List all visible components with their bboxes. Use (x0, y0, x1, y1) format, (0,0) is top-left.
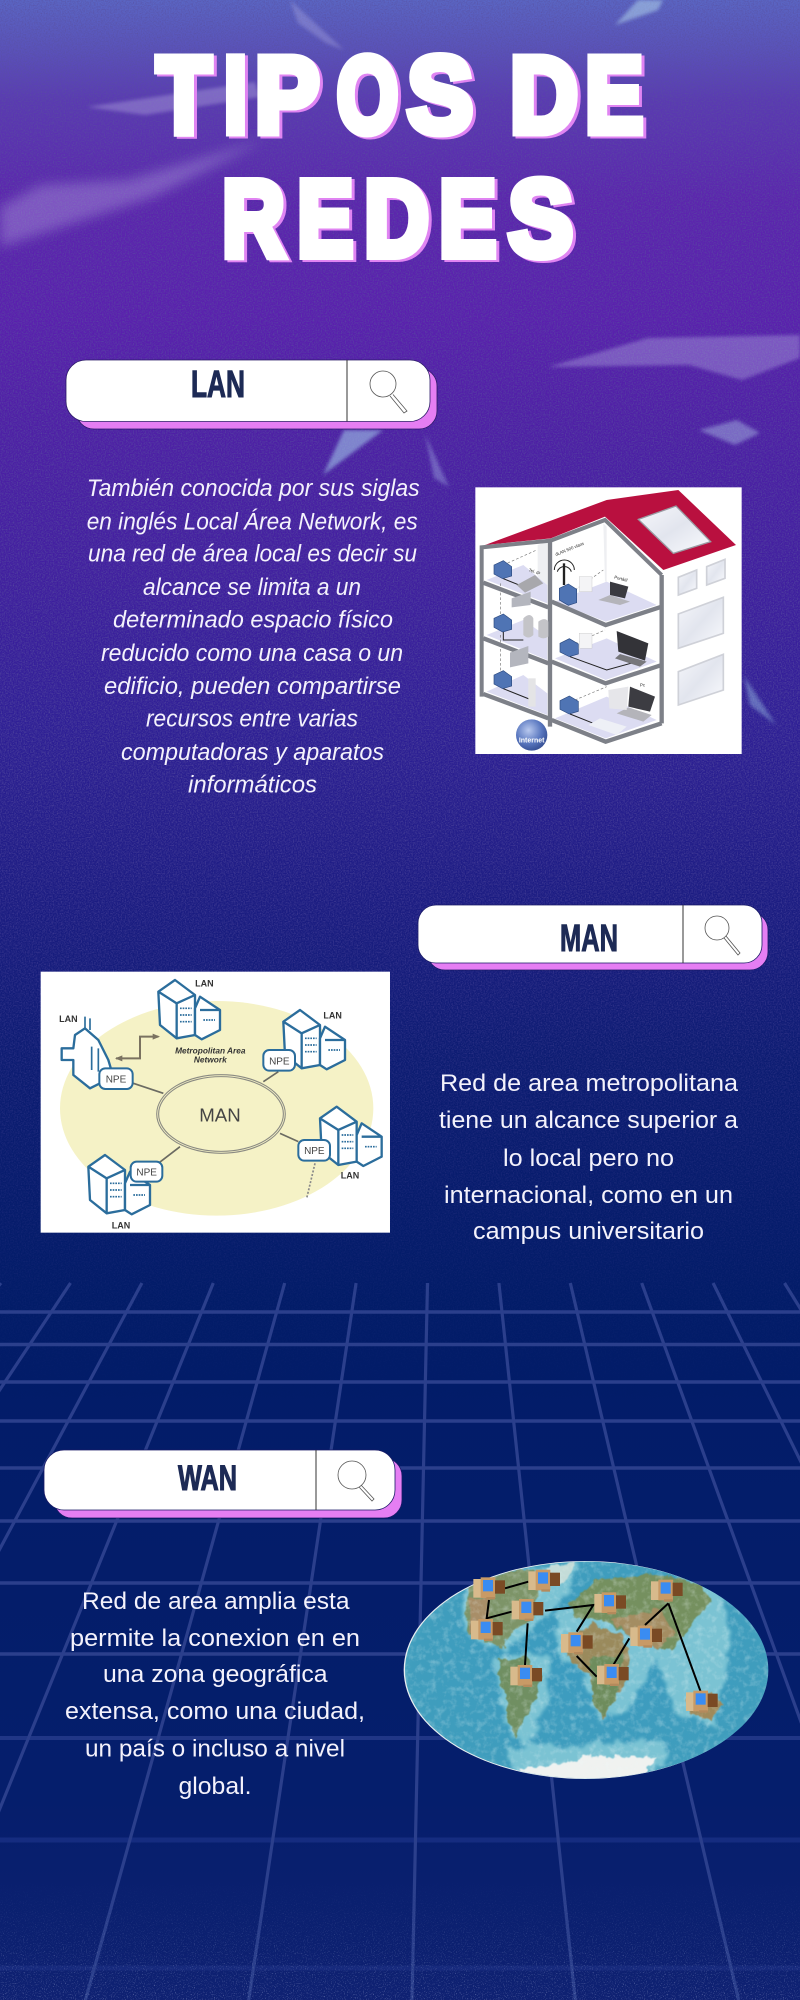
text block: LAN description (87, 475, 420, 799)
search bar: LAN: LAN (191, 364, 245, 406)
text block: WAN description (65, 1588, 365, 1800)
perspective grid (0, 1283, 800, 2000)
image: world map WAN diagram (403, 1560, 770, 1782)
text block: MAN description: tiene un alcance superior a (439, 1107, 738, 1134)
bottom sparkle texture (0, 1893, 800, 2000)
text block: LAN description: determinado espacio físico (113, 607, 393, 634)
image: MAN network diagram: Metropolitan Area (175, 1046, 246, 1056)
title: I (224, 36, 247, 156)
text block: WAN description: extensa, como una ciudad, (65, 1698, 365, 1725)
text block: LAN description: una red de área local es decir su (88, 541, 417, 568)
title: T (157, 34, 211, 155)
title: D (510, 36, 578, 156)
title: S (407, 35, 473, 155)
icon: magnifying glass (370, 371, 407, 413)
text block: LAN description: en inglés Local Área Network, es (87, 508, 418, 535)
title: E (297, 159, 353, 279)
title: S (508, 157, 573, 279)
image: MAN network diagram (41, 972, 390, 1233)
image: MAN network diagram: LAN (195, 979, 214, 989)
text block: WAN description: permite la conexion en en (70, 1625, 360, 1652)
text block: WAN description: global. (178, 1773, 252, 1800)
image: MAN network diagram: LAN (59, 1014, 78, 1024)
title: D (364, 157, 429, 278)
image: MAN network diagram: NPE (304, 1146, 325, 1157)
image: house LAN diagram: Pc (640, 683, 646, 688)
image: house LAN diagram: Internet (519, 738, 545, 745)
image: MAN network diagram: NPE (136, 1168, 157, 1179)
text block: WAN description: un país o incluso a nivel (85, 1736, 345, 1762)
search bar: WAN (44, 1450, 402, 1518)
text block: LAN description: recursos entre varias (146, 706, 358, 733)
text block: MAN description: campus universitario (473, 1218, 704, 1245)
text block: MAN description (439, 1070, 738, 1245)
search bar: MAN: MAN (560, 918, 618, 960)
image: MAN network diagram: LAN (341, 1170, 359, 1180)
image: MAN network diagram: NPE (106, 1075, 127, 1086)
text block: WAN description: una zona geográfica (103, 1661, 328, 1688)
text block: WAN description: Red de area amplia esta (82, 1588, 350, 1615)
image: house LAN diagram: dLAN 500 vlans (555, 541, 585, 557)
grain texture (0, 0, 800, 1400)
title: E (585, 34, 643, 155)
text block: LAN description: informáticos (188, 772, 317, 799)
image: house LAN diagram (475, 487, 742, 754)
search bar: WAN: WAN (178, 1459, 237, 1498)
image: house LAN diagram: Portátil (614, 574, 628, 583)
text block: LAN description: reducido como una casa o un (101, 640, 403, 667)
image: MAN network diagram: NPE (269, 1056, 290, 1067)
text block: LAN description: computadoras y aparatos (121, 739, 384, 766)
text block: LAN description: alcance se limita a un (143, 574, 361, 601)
text block: MAN description: lo local pero no (503, 1145, 674, 1172)
title (157, 34, 643, 279)
icon: magnifying glass (338, 1461, 374, 1501)
title: O (337, 35, 398, 156)
image: MAN network diagram: Network (194, 1055, 227, 1065)
title: R (222, 157, 285, 279)
text block: LAN description: edificio, pueden compartirse (104, 673, 401, 700)
text block: MAN description: internacional, como en un (444, 1182, 733, 1209)
title: E (439, 158, 496, 279)
icon: magnifying glass (705, 916, 740, 955)
text block: LAN description: También conocida por sus siglas (87, 475, 420, 502)
search bar: LAN (66, 360, 437, 429)
decorative shards (0, 0, 800, 725)
image: house LAN diagram: Tel. IP (528, 567, 541, 576)
text block: MAN description: Red de area metropolitana (440, 1070, 738, 1097)
image: MAN network diagram: LAN (323, 1010, 342, 1020)
image: MAN network diagram: MAN (199, 1105, 241, 1126)
image: MAN network diagram: LAN (112, 1221, 130, 1231)
title: P (255, 34, 319, 155)
search bar: MAN (418, 905, 768, 970)
